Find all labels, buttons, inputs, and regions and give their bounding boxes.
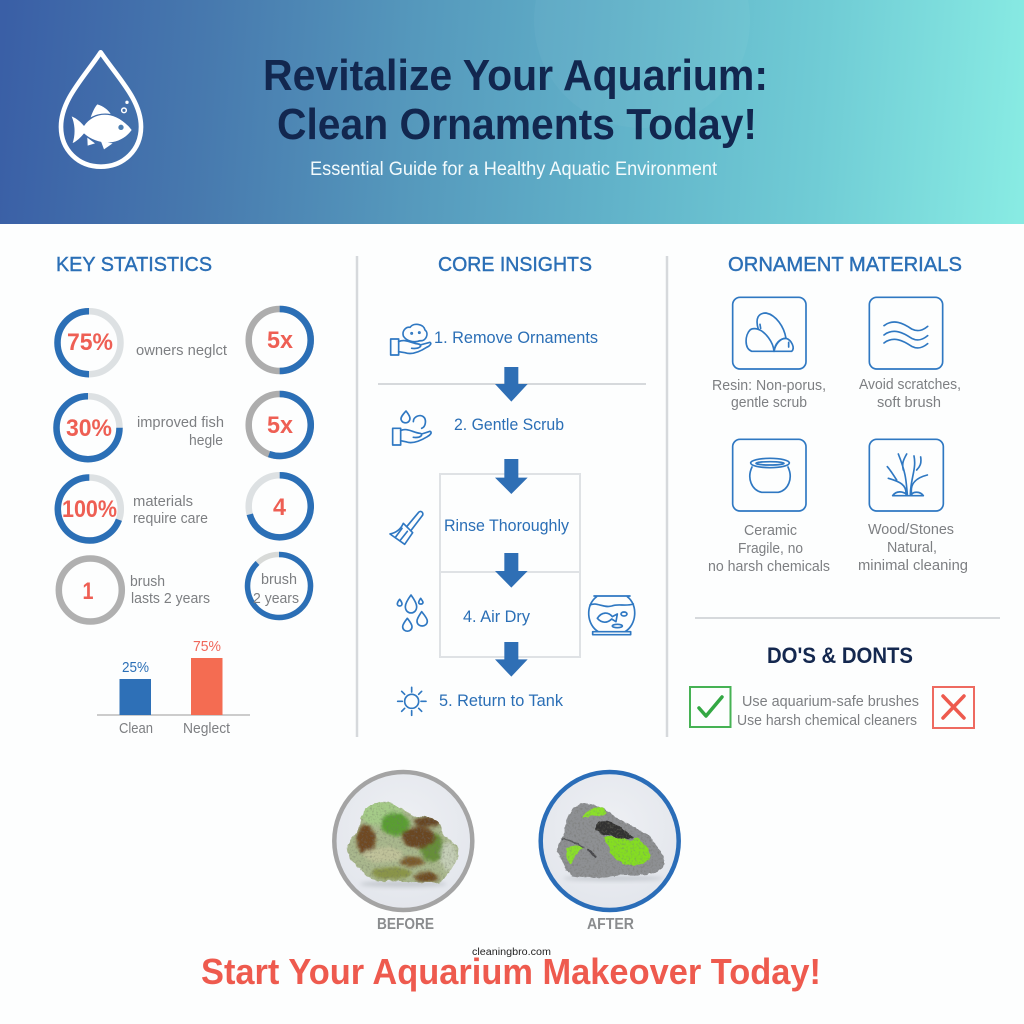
material captions: Wood/Stones	[868, 522, 954, 538]
subtitle: Essential Guide for a Healthy Aquatic Environment	[310, 159, 718, 180]
material captions: Natural,	[887, 540, 937, 556]
icon: waves	[869, 297, 943, 369]
material captions: Ceramic	[744, 523, 797, 539]
material captions: gentle scrub	[731, 395, 807, 411]
ring: brush 2 years	[248, 554, 311, 618]
label: brush lasts 2 years: brush	[130, 574, 165, 590]
column dividers	[357, 256, 667, 737]
call to action: Start Your Aquarium Makeover Today!	[201, 951, 821, 992]
icon: rocks	[733, 297, 806, 369]
do and don't text: Use harsh chemical cleaners	[737, 713, 917, 729]
label: materials require care: require care	[133, 511, 208, 527]
icon: water drops	[397, 595, 427, 631]
step box frame	[440, 474, 580, 657]
section rule	[695, 617, 1000, 619]
label: improved fish health: improved fish	[137, 415, 224, 431]
heading: do's and don'ts: DO'S & DONTS	[767, 643, 913, 668]
flow arrows	[495, 367, 528, 677]
bar chart: clean vs neglect	[97, 639, 250, 737]
icon: fish bowl	[589, 596, 635, 635]
label: materials require care: materials	[133, 494, 193, 510]
icon: ceramic pot	[733, 439, 806, 511]
title: Clean Ornaments Today!	[277, 100, 757, 149]
ring: 1: 1	[82, 578, 94, 605]
ring: 5x top	[249, 309, 311, 371]
material captions: Avoid scratches,	[859, 377, 961, 393]
ring: 4	[249, 475, 311, 537]
ring: 30% improved health	[56, 396, 120, 459]
header banner	[0, 0, 1024, 224]
ring: 100% materials	[58, 478, 121, 540]
label: owners neglect: owners neglct	[136, 343, 227, 359]
bar chart: clean vs neglect: Neglect	[183, 721, 230, 737]
before label: BEFORE	[377, 916, 434, 933]
heading: key statistics: KEY STATISTICS	[56, 254, 212, 276]
label: brush lasts 2 years	[130, 574, 210, 607]
do and don't text: Use aquarium-safe brushes	[742, 694, 919, 710]
material captions: no harsh chemicals	[708, 559, 830, 575]
label: materials require care	[133, 494, 208, 527]
icon: hand with drop and rock	[393, 411, 431, 445]
do and don't text	[737, 694, 919, 729]
bar chart: clean vs neglect: Clean	[119, 721, 153, 737]
bar chart: clean vs neglect: 75%	[193, 639, 221, 655]
ring: brush 2 years: brush	[261, 572, 297, 588]
bar chart: clean vs neglect: 25%	[122, 660, 149, 676]
step labels: 1. Remove Ornaments	[434, 328, 598, 347]
material captions: Resin: Non-porus,	[712, 378, 826, 394]
watermark: cleaningbro.com	[472, 947, 551, 958]
panel: core insights	[378, 254, 646, 715]
step icons	[390, 324, 635, 715]
ring: 4: 4	[273, 494, 287, 521]
ring: 5x middle: 5x	[267, 412, 294, 439]
icon: brush	[390, 511, 423, 544]
material captions	[708, 377, 968, 575]
material captions: minimal cleaning	[858, 558, 968, 574]
material captions: Fragile, no	[738, 541, 803, 557]
material captions: soft brush	[877, 395, 941, 411]
logo: water drop with fish	[61, 52, 141, 167]
ring: 75% owners neglect	[58, 311, 120, 374]
heading: core insights: CORE INSIGHTS	[438, 254, 592, 276]
icon tiles	[733, 297, 943, 511]
horizontal rule	[378, 383, 646, 385]
before photo	[334, 772, 472, 910]
ring: 5x top: 5x	[267, 327, 294, 354]
label: brush lasts 2 years: lasts 2 years	[131, 591, 210, 607]
label: improved fish health: hegle	[189, 433, 223, 449]
icon: sun	[398, 687, 426, 715]
label: improved fish health	[137, 415, 224, 449]
step labels: 4. Air Dry	[463, 607, 530, 626]
ring: 75% owners neglect: 75%	[67, 329, 113, 356]
icon: check box	[690, 687, 730, 727]
ring: 1	[59, 558, 122, 622]
after label: AFTER	[587, 916, 634, 933]
icon: driftwood tree	[869, 439, 943, 511]
icon: hand with rock	[391, 324, 431, 355]
panel: ornament materials	[690, 254, 1000, 729]
step labels: 5. Return to Tank	[439, 691, 563, 710]
ring: brush 2 years: 2 years	[253, 591, 299, 607]
after photo	[541, 772, 679, 910]
panel: key statistics	[56, 254, 311, 737]
step labels: Rinse Thoroughly	[444, 516, 569, 535]
heading: ornament materials: ORNAMENT MATERIALS	[728, 254, 962, 276]
ring: 100% materials: 100%	[62, 496, 117, 523]
ring: 30% improved health: 30%	[66, 415, 112, 442]
title	[263, 51, 768, 149]
step labels	[434, 328, 598, 710]
ring: 5x middle	[249, 394, 311, 456]
step labels: 2. Gentle Scrub	[454, 415, 564, 434]
icon: cross box	[933, 687, 974, 728]
title: Revitalize Your Aquarium:	[263, 51, 768, 100]
